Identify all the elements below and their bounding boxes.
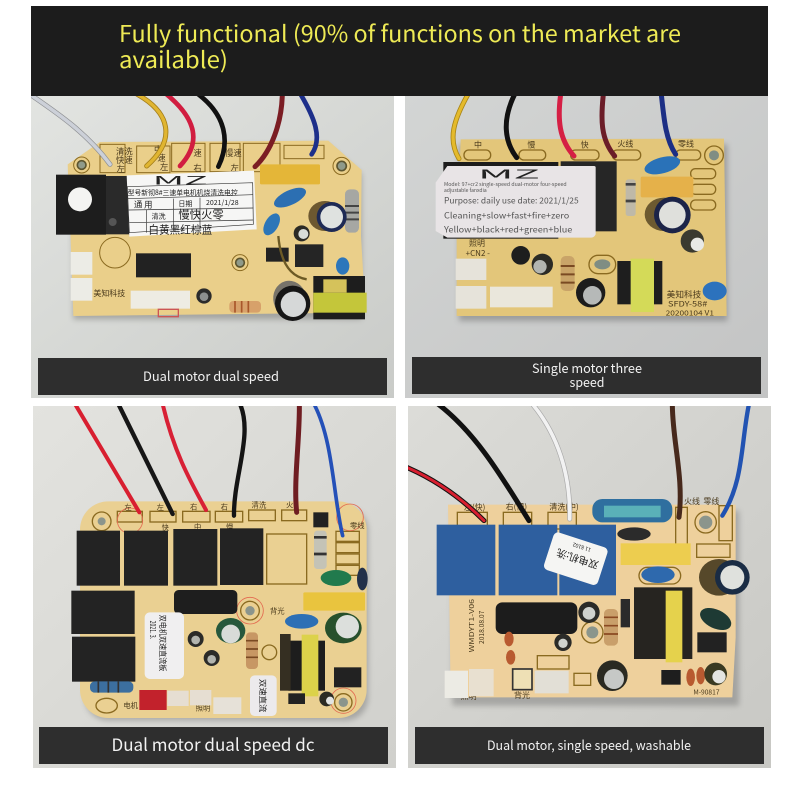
panel: dual motor dual speed board: 速 <box>193 147 202 159</box>
panel: dual motor dual speed board: 速 <box>157 152 166 164</box>
caption: dual motor dual speed dc <box>39 727 388 764</box>
panel: dual motor dual speed dc board: 中 <box>194 521 201 532</box>
panel: dual motor dual speed dc board <box>33 404 396 768</box>
panel: dual motor single speed washable board: 左(快) <box>464 502 485 513</box>
sticker: model label: Yellow+black+red+green+blue <box>443 224 573 236</box>
label sticker: 双电机:洗 <box>554 546 600 574</box>
panel: dual motor single speed washable board: 右(慢) <box>506 501 527 512</box>
panel: dual motor dual speed board: 左 <box>160 161 168 173</box>
panel: dual motor dual speed board <box>30 94 394 398</box>
panel: dual motor single speed washable board: M-90817 <box>693 687 720 697</box>
circuit board <box>68 141 363 316</box>
panel: single motor three speed board: 零线 <box>678 139 694 150</box>
relays <box>437 525 616 595</box>
caption: single motor three speed: speed <box>570 372 604 391</box>
caption: dual motor dual speed dc: Dual motor dual speed dc <box>112 731 315 756</box>
panel: dual motor dual speed dc board: 左 <box>124 502 132 513</box>
sticker: model label: Cleaning+slow+fast+fire+zero <box>444 210 569 222</box>
panel: single motor three speed board: 照明 <box>469 238 485 249</box>
caption: dual motor dual speed <box>38 358 387 395</box>
circuit board <box>457 139 727 316</box>
sticker: model label <box>127 171 257 237</box>
panel: dual motor single speed washable board: WMDYT1-V06 <box>466 599 476 652</box>
relays <box>56 175 131 235</box>
panel: single motor three speed board: 火线 <box>617 139 633 150</box>
wires <box>453 94 676 159</box>
sticker: model label: Model: 97+cr2 single-speed dual-motor four-speed <box>444 181 567 188</box>
panel: single motor three speed board: 快 <box>581 140 589 151</box>
panel: dual motor dual speed dc board: 背光 <box>270 605 285 616</box>
panel: dual motor dual speed dc board: 火 <box>286 499 294 510</box>
wires <box>407 404 749 521</box>
title banner <box>31 6 768 96</box>
panel: single motor three speed board: 慢 <box>527 140 535 151</box>
capacitors and components <box>90 512 368 714</box>
caption: single motor three speed <box>412 357 761 394</box>
panel: dual motor dual speed board: 右 <box>193 162 202 174</box>
panel: dual motor single speed washable board <box>407 404 771 768</box>
panel: dual motor dual speed dc board: 快 <box>162 522 170 533</box>
panel: dual motor dual speed dc board: 零线 <box>350 520 365 531</box>
sticker: model label: MZ <box>478 166 540 183</box>
relays <box>443 161 617 239</box>
relays <box>71 528 263 682</box>
toroid and label stickers: 双速直流 <box>257 679 268 712</box>
panel: dual motor dual speed dc board: 右 <box>221 501 228 512</box>
panel: dual motor dual speed dc board: 电机 <box>123 700 139 711</box>
toroid and label stickers <box>145 590 277 716</box>
sticker: model label <box>436 166 596 238</box>
circuit board <box>80 501 367 718</box>
sticker: model label: 慢快火零 <box>178 206 224 222</box>
sticker: model label: 型号新彻8#三速单电机机烧清洗电控 <box>128 188 238 198</box>
sticker: model label: Purpose: daily use date: 2021/1/25 <box>444 195 579 207</box>
panel: dual motor dual speed board: 快速 <box>116 154 133 166</box>
panel: single motor three speed board: +CN2 - <box>466 248 490 259</box>
circuit board <box>448 505 736 697</box>
panel: single motor three speed board: 20200104 V1 <box>666 308 714 318</box>
panel: dual motor dual speed board: 慢速 <box>225 147 242 159</box>
toroid and label stickers: 2021. 3. <box>147 621 158 639</box>
panel: dual motor single speed washable board: 背光 <box>514 690 530 701</box>
sticker: model label: 白黄黑红棕蓝 <box>148 222 213 237</box>
panel: dual motor single speed washable board: 火线 <box>684 496 700 507</box>
title text: available) <box>119 41 228 75</box>
panel: dual motor dual speed board: 左 <box>117 163 125 175</box>
capacitors and components <box>445 499 750 698</box>
panel: dual motor dual speed dc board: 照明 <box>196 703 210 714</box>
panel: single motor three speed board <box>405 94 768 398</box>
panel: dual motor dual speed dc board: 右 <box>190 501 197 512</box>
panel: dual motor dual speed dc board: 清洗 <box>252 499 267 510</box>
wires <box>75 404 343 536</box>
sticker: model label: 日期 <box>178 199 192 209</box>
panel: dual motor dual speed dc board: 慢 <box>226 521 234 532</box>
sticker: model label: 清洗 <box>152 212 166 222</box>
toroid and label stickers: 双电机双速直流板 <box>157 615 168 671</box>
panel: dual motor dual speed dc board: 左 <box>157 502 164 513</box>
panel: dual motor single speed washable board: 照明 <box>461 691 477 702</box>
label sticker: 11 8102 <box>571 541 592 554</box>
panel: single motor three speed board: 美知科技 <box>667 289 702 301</box>
title text: Fully functional (90% of functions on the market are <box>119 15 681 49</box>
caption: single motor three speed: Single motor three <box>532 358 642 377</box>
panel: single motor three speed board: 中 <box>474 140 482 151</box>
panel: dual motor single speed washable board: 清洗(中) <box>549 501 579 512</box>
label sticker <box>543 531 609 586</box>
panel: single motor three speed board: SFDY-58# <box>668 299 707 310</box>
sticker: model label: 通 用 <box>134 199 153 211</box>
wires <box>30 94 317 167</box>
caption: dual motor, single speed, washable: Dual motor, single speed, washable <box>487 735 691 754</box>
capacitors and components <box>71 164 367 322</box>
sticker: model label: 2021/1/28 <box>206 198 239 208</box>
panel: dual motor single speed washable board: 2018.08.07 <box>476 610 486 644</box>
caption: dual motor dual speed: Dual motor dual speed <box>143 366 279 385</box>
panel: dual motor dual speed board: 清洗 <box>116 145 133 157</box>
panel: dual motor single speed washable board: 零线 <box>703 496 719 507</box>
caption: dual motor, single speed, washable <box>415 727 764 764</box>
sticker: model label: MZ <box>153 172 208 188</box>
panel: dual motor dual speed board: 中 <box>154 144 162 156</box>
panel: dual motor dual speed board: 美知科技 <box>93 288 125 299</box>
sticker: model label: adjustable fanxdia <box>444 187 487 194</box>
panel: dual motor dual speed board: 左 <box>231 162 239 174</box>
capacitors and components <box>456 153 727 312</box>
